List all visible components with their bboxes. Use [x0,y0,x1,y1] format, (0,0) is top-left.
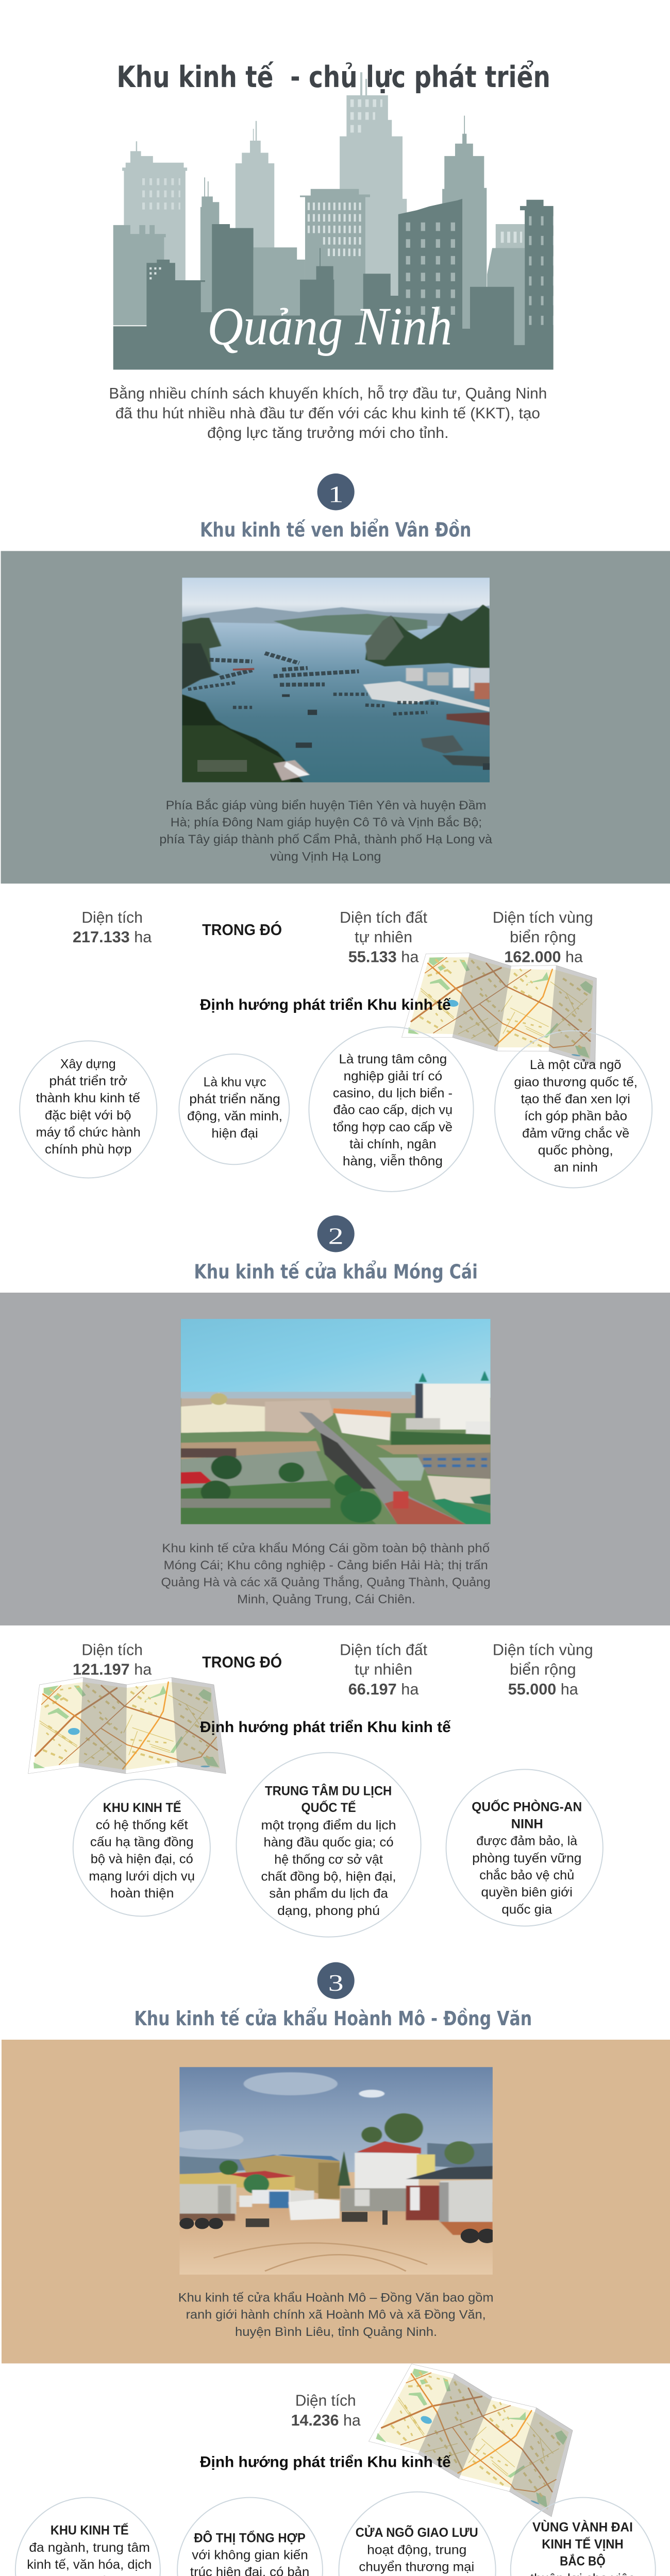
circle: Vùng vành đai kinh tế: KINH TẾ VỊNH [542,2536,624,2551]
circle: Trung tâm du lịch quốc tế: sản phẩm du lịch đa [269,1887,389,1901]
stats: Móng Cái: TRONG ĐÓ [202,1653,282,1671]
circle: Đô thị tổng hợp [177,2498,323,2576]
circle: Khu kinh tế: cấu hạ tầng đồng [90,1835,194,1850]
description: Vân Đồn [159,798,492,863]
circle: Trung tâm du lịch quốc tế: QUỐC TẾ [301,1800,356,1815]
circle: Trung tâm du lịch quốc tế [236,1753,421,1937]
stats: Móng Cái: 121.197 ha [73,1660,152,1679]
number badge 1: 1 [328,481,344,507]
circle: Khu kinh tế đa ngành: đa ngành, trung tâm [29,2540,150,2555]
description: Móng Cái: Minh, Quảng Trung, Cái Chiên. [237,1592,415,1606]
circle: Vùng vành đai kinh tế: BẮC BỘ [560,2553,606,2569]
intro text: đã thu hút nhiều nhà đầu tư đến với các khu kinh tế (KKT), tạo [115,405,540,422]
circle: khu vực năng động: Là khu vực [204,1075,266,1089]
circle: trung tâm công nghiệp giải trí: casino, du lịch biển - [333,1087,453,1100]
city name: Quảng Ninh: Quảng Ninh [207,296,452,357]
circle: cửa ngõ giao thương: đảm vững chắc về [522,1126,629,1141]
circle: Quốc phòng an ninh: phòng tuyến vững [472,1851,581,1866]
number badge 2 [317,1215,355,1252]
circle: Khu kinh tế [73,1779,210,1916]
description: Móng Cái: Khu kinh tế cửa khẩu Móng Cái gồm toàn bộ thành phố [162,1541,490,1555]
circle: Xây dựng: đặc biệt với bộ [45,1108,131,1123]
circle: Trung tâm du lịch quốc tế: chất đồng bộ, hiện đại, [261,1870,396,1884]
circle: trung tâm công nghiệp giải trí: hàng, viễn thông [343,1154,443,1168]
circle: Quốc phòng an ninh: quyền biên giới [481,1886,573,1900]
circle: Trung tâm du lịch quốc tế: hệ thống cơ sở vật [274,1853,383,1867]
circle: cửa ngõ giao thương: quốc phòng, [538,1144,613,1158]
map illustration 1 [402,945,609,1065]
circle: Xây dựng: chính phù hợp [45,1143,131,1157]
intro text: động lực tăng trưởng mới cho tỉnh. [207,425,449,442]
stats: Móng Cái: Diện tích đất [340,1640,427,1658]
circle: khu vực năng động [179,1054,289,1164]
circle: Khu kinh tế đa ngành: kinh tế, văn hóa, dịch [27,2557,152,2572]
circle: trung tâm công nghiệp giải trí: tài chính, ngân [349,1137,436,1151]
circle: Khu kinh tế: KHU KINH TẾ [103,1800,181,1815]
panel: Vân Đồn [1,551,670,884]
circle: Cửa ngõ giao lưu: hoạt động, trung [367,2543,466,2557]
circle: Trung tâm du lịch quốc tế: một trọng điểm du lịch [261,1818,396,1833]
description: Hoành Mô [178,2291,494,2338]
stats: Móng Cái: 66.197 ha [348,1680,419,1698]
stats: Móng Cái: biển rộng [510,1660,576,1679]
intro text: Bằng nhiều chính sách khuyến khích, hỗ trợ đầu tư, Quảng Ninh [109,385,547,402]
circle: Khu kinh tế: hoàn thiện [110,1886,174,1901]
circle: cửa ngõ giao thương: ích góp phần bảo [524,1109,627,1124]
circle: Khu kinh tế đa ngành: KHU KINH TẾ [51,2522,129,2538]
description: Vân Đồn: vùng Vịnh Hạ Long [270,850,381,863]
description: Vân Đồn: Hà; phía Đông Nam giáp huyện Cô Tô và Vịnh Bắc Bộ; [171,815,482,829]
circle: Xây dựng [20,1041,157,1178]
subheading: Định hướng 3: Định hướng phát triển Khu kinh tế [200,2453,451,2470]
stats: Hoành Mô: 14.236 ha [291,2411,361,2429]
circle: Đô thị tổng hợp: ĐÔ THỊ TỔNG HỢP [194,2530,306,2545]
circle: cửa ngõ giao thương: giao thương quốc tế, [514,1075,638,1089]
circle: Quốc phòng an ninh: chắc bảo vệ chủ [479,1868,574,1883]
stats: Móng Cái: 55.000 ha [508,1680,578,1698]
circle: Khu kinh tế: mạng lưới dịch vụ [89,1869,195,1884]
circle: cửa ngõ giao thương [495,1031,652,1188]
heading: section 1: Khu kinh tế ven biển Vân Đồn [200,518,471,541]
description: Vân Đồn: phía Tây giáp thành phố Cẩm Phả, thành phố Hạ Long và [159,833,492,846]
circle: Cửa ngõ giao lưu: chuyển thương mại [359,2560,474,2574]
circle: trung tâm công nghiệp giải trí: nghiệp giải trí có [344,1069,442,1083]
stats: Vân Đồn: Diện tích [81,908,143,926]
map illustration 3 [368,2353,587,2517]
photo: Vân Đồn bay [182,578,490,782]
stats: Vân Đồn: 217.133 ha [73,928,152,946]
map illustration 2 [28,1677,226,1774]
number badge 2: 2 [328,1223,344,1249]
photo: Móng Cái [181,1319,491,1524]
circle: cửa ngõ giao thương: Là một cửa ngõ [530,1058,621,1072]
panel: Móng Cái [0,1293,670,1625]
description: Móng Cái: Móng Cái; Khu công nghiệp - Cảng biển Hải Hà; thị trấn [164,1558,488,1572]
stats: Vân Đồn: 162.000 ha [504,947,583,965]
stats: Móng Cái: Diện tích [81,1640,143,1658]
circle: trung tâm công nghiệp giải trí: đảo cao cấp, dịch vụ [333,1103,453,1117]
circle: Xây dựng: máy tổ chức hành [36,1125,141,1140]
circle: khu vực năng động: động, văn minh, [187,1109,282,1124]
number badge 3: 3 [328,1970,344,1996]
description: Hoành Mô: ranh giới hành chính xã Hoành Mô và xã Đồng Văn, [186,2308,486,2321]
subheading: Định hướng 2: Định hướng phát triển Khu kinh tế [200,1719,451,1736]
stats: Móng Cái: tự nhiên [355,1660,412,1679]
description: Hoành Mô: Khu kinh tế cửa khẩu Hoành Mô – Đồng Văn bao gồm [178,2291,494,2304]
circle: cửa ngõ giao thương: tạo thế đan xen lợi [521,1092,630,1107]
circle: Quốc phòng an ninh: quốc gia [501,1903,552,1917]
circle: Cửa ngõ giao lưu [339,2492,496,2576]
circle: Trung tâm du lịch quốc tế: hàng đầu quốc gia; có [264,1836,394,1850]
circle: Quốc phòng an ninh: được đảm bảo, là [476,1834,578,1849]
circle: trung tâm công nghiệp giải trí: Là trung tâm công [339,1052,447,1066]
circle: Xây dựng: Xây dựng [60,1057,116,1071]
number badge 1 [317,473,355,510]
circle: Khu kinh tế: có hệ thống kết [96,1818,188,1832]
photo: Hoành Mô [166,2067,496,2275]
circle: trung tâm công nghiệp giải trí [309,1027,474,1192]
circle: cửa ngõ giao thương: an ninh [554,1161,598,1175]
circle: trung tâm công nghiệp giải trí: tổng hợp cao cấp về [333,1120,453,1134]
heading: section 2: Khu kinh tế cửa khẩu Móng Cái [194,1260,478,1283]
circle: Quốc phòng an ninh: NINH [511,1817,543,1832]
stats: Vân Đồn: Diện tích vùng [493,908,593,926]
description: Vân Đồn: Phía Bắc giáp vùng biển huyện Tiên Yên và huyện Đầm [166,798,486,812]
stats: Móng Cái [73,1640,593,1698]
subheading: Định hướng 1: Định hướng phát triển Khu kinh tế [200,996,451,1013]
stats: Vân Đồn: Diện tích đất [340,908,427,926]
circle: Xây dựng: phát triển trở [49,1074,127,1089]
circle: Vùng vành đai kinh tế: VÙNG VÀNH ĐAI [532,2519,633,2534]
stats: Hoành Mô: Diện tích [295,2391,356,2410]
circle: khu vực năng động: phát triển năng [189,1092,280,1107]
stats: Vân Đồn [73,908,593,965]
panel: Hoành Mô [2,2040,670,2363]
description: Móng Cái: Quảng Hà và các xã Quảng Thắng, Quảng Thành, Quảng [161,1575,491,1589]
intro text [109,385,547,442]
circle: Cửa ngõ giao lưu: CỬA NGÕ GIAO LƯU [356,2525,478,2540]
circle: Đô thị tổng hợp: với không gian kiến [192,2548,308,2563]
stats: Vân Đồn: TRONG ĐÓ [202,921,282,939]
circle: khu vực năng động: hiện đại [211,1126,258,1141]
stats: Hoành Mô [291,2391,361,2429]
stats: Vân Đồn: tự nhiên [355,928,412,946]
circle: Trung tâm du lịch quốc tế: TRUNG TÂM DU LỊCH [265,1783,392,1799]
circle: Xây dựng: thành khu kinh tế [36,1091,140,1106]
description: Hoành Mô: huyện Bình Liêu, tỉnh Quảng Ninh. [235,2325,437,2338]
description: Móng Cái [161,1541,491,1606]
stats: Móng Cái: Diện tích vùng [493,1640,593,1658]
circle: Khu kinh tế đa ngành [15,2498,160,2576]
circle: Vùng vành đai kinh tế [511,2498,656,2576]
number badge 3 [317,1962,355,1999]
circle: Khu kinh tế: bộ và hiện đại, có [91,1852,193,1867]
circle: Quốc phòng an ninh: QUỐC PHÒNG-AN [472,1799,582,1814]
circle: Quốc phòng an ninh [446,1769,603,1926]
stats: Vân Đồn: 55.133 ha [348,947,419,965]
circle: Trung tâm du lịch quốc tế: dạng, phong phú [277,1904,380,1918]
skyline illustration [113,72,554,369]
stats: Vân Đồn: biển rộng [510,928,576,946]
